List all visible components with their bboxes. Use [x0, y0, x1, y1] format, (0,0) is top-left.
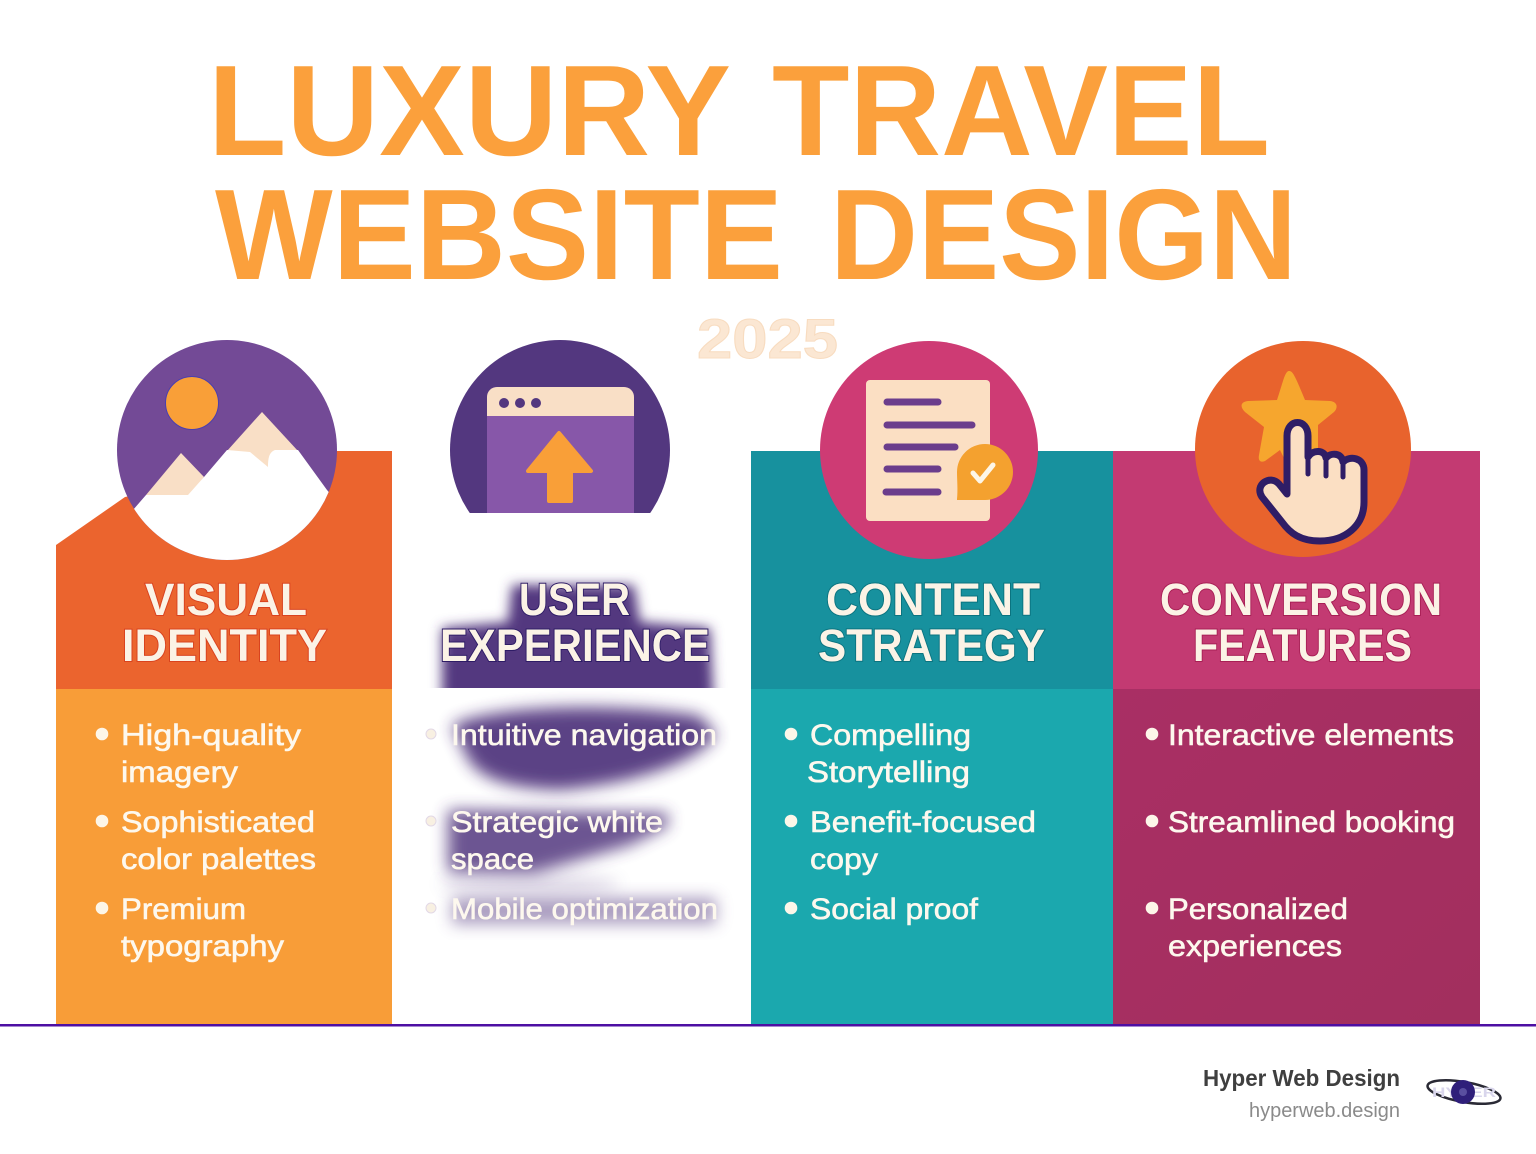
- list: visual identity: High-quality: [121, 719, 301, 752]
- icon: browser window with arrow: [450, 340, 670, 513]
- list: content strategy: copy: [810, 843, 878, 876]
- list: content strategy: [785, 719, 1036, 926]
- list: conversion features: [1146, 719, 1455, 963]
- footer brand: [1203, 1065, 1502, 1122]
- panel: content strategy: [751, 341, 1113, 1024]
- icon: brand logo: HYPER: [1432, 1084, 1496, 1100]
- heading: visual identity: [122, 574, 327, 671]
- list: user experience: Mobile optimization: [451, 893, 718, 926]
- list: user experience: [426, 719, 718, 926]
- panel: conversion features: [1113, 341, 1480, 1024]
- panel: visual identity: [56, 340, 392, 1024]
- heading: content strategy: CONTENT: [826, 574, 1040, 625]
- body band: visual identity: [56, 689, 392, 1024]
- list: user experience: Intuitive navigation: [451, 719, 717, 752]
- heading: content strategy: STRATEGY: [818, 620, 1045, 671]
- heading: user experience: [440, 574, 710, 671]
- heading: content strategy: [818, 574, 1045, 671]
- blurred backdrop: user experience: [440, 585, 716, 924]
- list: conversion features: Streamlined booking: [1168, 806, 1455, 839]
- list: user experience: space: [451, 843, 534, 876]
- list: visual identity: Sophisticated: [121, 806, 315, 839]
- title: DESIGN: [830, 163, 1297, 307]
- icon: brand logo: [1426, 1076, 1502, 1108]
- list: conversion features: experiences: [1168, 930, 1342, 963]
- title: [208, 39, 1297, 307]
- title: LUXURY: [208, 39, 731, 183]
- heading: conversion features: FEATURES: [1193, 620, 1412, 671]
- heading: conversion features: [1160, 574, 1442, 671]
- icon: document with badge: [820, 341, 1038, 559]
- header band: conversion features: [1113, 451, 1480, 689]
- title: WEBSITE: [215, 163, 783, 307]
- list: content strategy: Compelling: [810, 719, 971, 752]
- list: visual identity: imagery: [121, 756, 238, 789]
- list: conversion features: Personalized: [1168, 893, 1348, 926]
- year label: 2025: [697, 307, 838, 370]
- list: content strategy: Storytelling: [807, 756, 970, 789]
- body band: conversion features: [1113, 689, 1480, 1024]
- list: conversion features: Interactive elements: [1168, 719, 1454, 752]
- list: content strategy: Social proof: [810, 893, 979, 926]
- heading: user experience: USER: [519, 574, 630, 625]
- list: visual identity: Premium: [121, 893, 246, 926]
- heading: user experience: EXPERIENCE: [440, 620, 710, 671]
- list: visual identity: typography: [121, 930, 284, 963]
- icon: hand pointing at star: [1195, 341, 1411, 557]
- header band: visual identity: [56, 451, 392, 689]
- list: visual identity: [96, 719, 316, 963]
- heading: visual identity: VISUAL: [145, 574, 307, 625]
- header band: content strategy: [751, 451, 1113, 689]
- heading: visual identity: IDENTITY: [122, 620, 327, 671]
- brand name: Hyper Web Design: [1203, 1065, 1400, 1091]
- icon: mountain and sun: [117, 340, 340, 570]
- brand url: hyperweb.design: [1249, 1100, 1400, 1122]
- title: TRAVEL: [772, 39, 1270, 183]
- list: content strategy: Benefit-focused: [810, 806, 1036, 839]
- panel: user experience: [426, 340, 718, 926]
- body band: content strategy: [751, 689, 1113, 1024]
- heading: conversion features: CONVERSION: [1160, 574, 1442, 625]
- list: user experience: Strategic white: [451, 806, 663, 839]
- list: visual identity: color palettes: [121, 843, 316, 876]
